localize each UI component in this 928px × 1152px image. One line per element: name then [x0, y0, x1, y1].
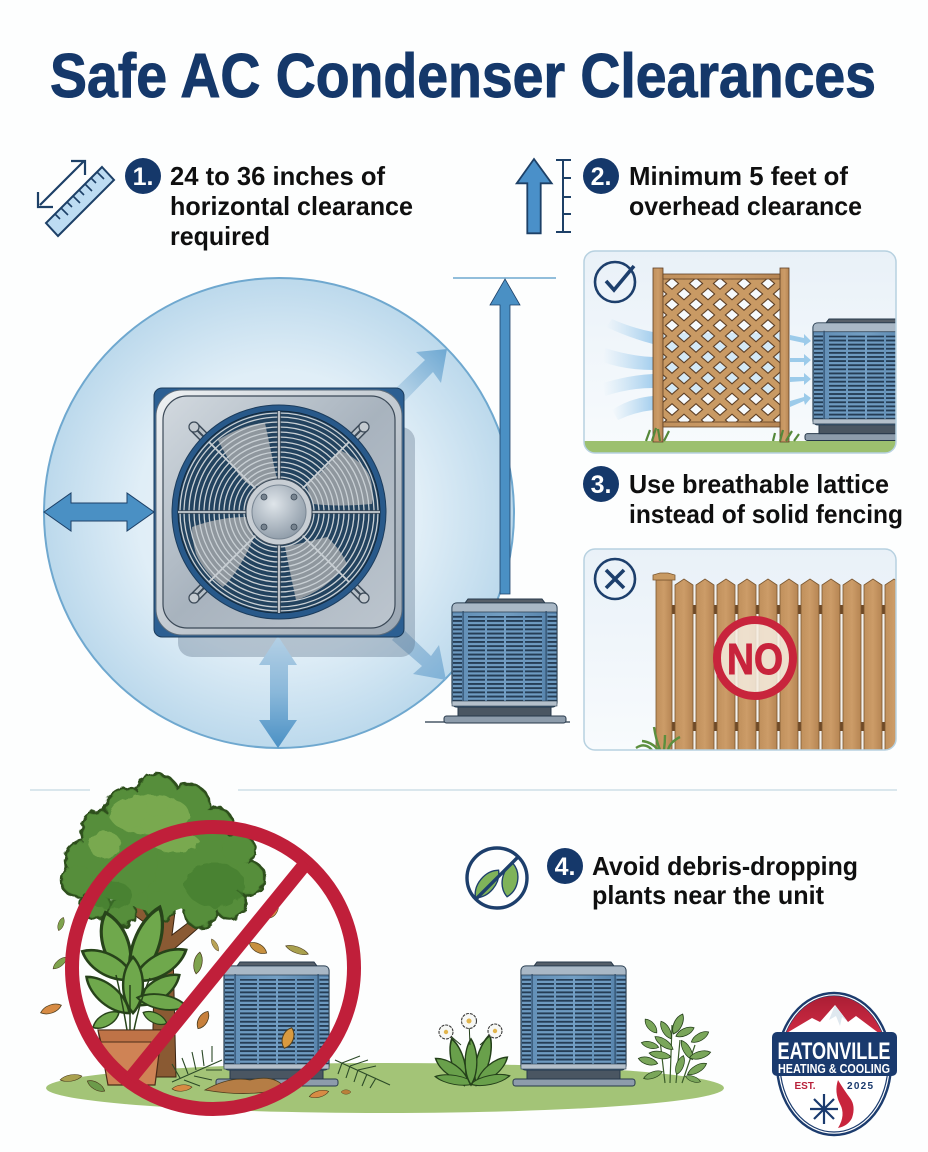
step 4: debris plants — [467, 848, 858, 910]
step 1 text — [170, 161, 413, 251]
icon: up arrow with scale — [517, 159, 571, 233]
logo: Eatonville Heating & Cooling: HEATING & COOLING — [778, 1061, 890, 1076]
ground line — [425, 721, 570, 723]
logo: Eatonville Heating & Cooling — [772, 993, 897, 1135]
divider — [30, 789, 897, 791]
step 1: horizontal clearance — [38, 158, 413, 251]
lattice screen — [653, 268, 789, 442]
wind streams — [610, 320, 653, 420]
arrow: left double — [44, 493, 154, 531]
logo: Eatonville Heating & Cooling: 2025 — [847, 1081, 873, 1092]
arrow: diagonal down right — [392, 628, 446, 680]
unit shadow — [178, 427, 415, 657]
pine needles — [172, 1046, 390, 1088]
step 2 text — [629, 161, 862, 221]
step 2 text: overhead clearance — [629, 191, 862, 221]
grass tuft — [636, 727, 680, 750]
badge 2: 2. — [591, 163, 611, 191]
logo: Eatonville Heating & Cooling: EATONVILLE — [778, 1038, 890, 1065]
condenser with debris — [216, 962, 338, 1086]
condenser top view with fan — [154, 388, 404, 637]
NO sign: NO — [727, 635, 783, 684]
step 3 text — [629, 469, 903, 529]
badge 3 — [583, 466, 619, 502]
grass tufts — [646, 428, 799, 441]
potted plant — [78, 903, 191, 1085]
step 3 text: instead of solid fencing — [629, 499, 903, 529]
panel: breathable lattice — [584, 251, 927, 453]
condenser unit side view — [444, 599, 566, 723]
flowers — [432, 1014, 511, 1089]
badge 3: 3. — [591, 471, 611, 499]
condenser behind lattice — [804, 318, 896, 441]
condenser clear of debris — [513, 962, 635, 1086]
step 1 text: 24 to 36 inches of — [170, 161, 385, 191]
scene: good placement — [432, 962, 712, 1089]
panel: solid fence — [584, 549, 903, 750]
prohibition sign — [72, 827, 354, 1109]
step 1 text: required — [170, 221, 270, 251]
step 4 text: Avoid debris-dropping — [592, 851, 858, 881]
step 2: overhead clearance — [517, 158, 862, 233]
badge 1 — [125, 158, 161, 194]
overhead limit line — [453, 277, 556, 279]
fan guard mounting tabs — [194, 427, 364, 598]
badge 1: 1. — [133, 163, 153, 191]
arrow: bottom double — [259, 636, 297, 748]
tree — [61, 774, 265, 1077]
step 1 text: horizontal clearance — [170, 191, 413, 221]
NO sign — [717, 620, 793, 696]
fence — [653, 573, 903, 750]
logo: Eatonville Heating & Cooling: EST. — [794, 1081, 816, 1092]
icon: ruler with double arrow — [38, 161, 114, 236]
badge 4: 4. — [555, 853, 575, 881]
scene: bad placement with tree and plant — [39, 774, 390, 1109]
icon: check mark — [595, 262, 635, 302]
diagram: clearance zone around condenser — [44, 278, 570, 748]
step 2 text: Minimum 5 feet of — [629, 161, 848, 191]
airflow arrows — [790, 334, 811, 407]
icon: no leaves — [467, 848, 527, 908]
grass strip — [584, 441, 896, 453]
badge 4 — [547, 848, 583, 884]
step 3 text: Use breathable lattice — [629, 469, 889, 499]
icon: cross mark — [595, 559, 635, 599]
bush — [637, 1012, 712, 1084]
fan — [172, 405, 386, 619]
step 4 text — [592, 851, 858, 910]
arrow: overhead clearance — [490, 279, 520, 594]
step 3: lattice — [583, 466, 903, 529]
flame and snowflake — [810, 1080, 854, 1128]
clearance circle — [44, 278, 514, 748]
arrow: diagonal up right — [392, 349, 447, 404]
badge 2 — [583, 158, 619, 194]
falling leaves and debris — [39, 902, 351, 1100]
ground ellipse — [46, 1063, 724, 1113]
step 4 text: plants near the unit — [592, 880, 824, 910]
